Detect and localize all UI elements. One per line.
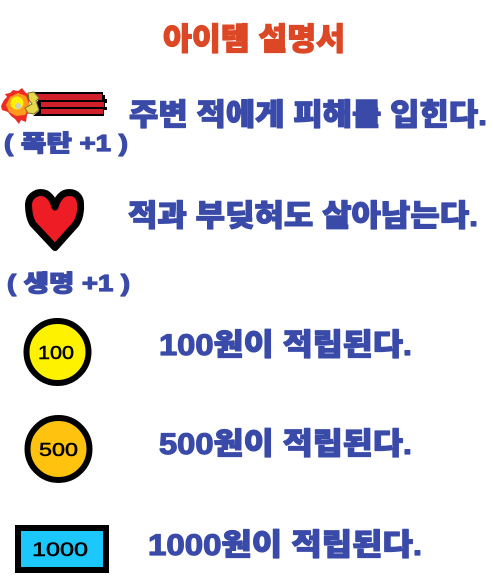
100 description: 100원이 적립된다. xyxy=(159,329,412,362)
icon: bomb xyxy=(1,88,107,124)
life label: ( 생명 +1 ) xyxy=(7,270,130,296)
life description: 적과 부딪혀도 살아남는다. xyxy=(128,200,478,233)
1000 description: 1000원이 적립된다. xyxy=(148,529,422,562)
icon: 1000 bill xyxy=(18,528,106,570)
bomb label: ( 폭탄 +1 ) xyxy=(4,130,128,156)
500 description: 500원이 적립된다. xyxy=(159,428,412,461)
icon: 1000 bill: 1000 xyxy=(32,540,88,561)
title: 아이템 설명서 xyxy=(163,22,345,57)
icon: 500 coin: 500 xyxy=(39,440,78,460)
icon: 100 coin: 100 xyxy=(38,343,74,363)
icon: 500 coin xyxy=(28,418,90,480)
bomb description: 주변 적에게 피해를 입힌다. xyxy=(129,99,487,132)
icon: 100 coin xyxy=(26,321,88,383)
icon: heart xyxy=(28,192,81,248)
